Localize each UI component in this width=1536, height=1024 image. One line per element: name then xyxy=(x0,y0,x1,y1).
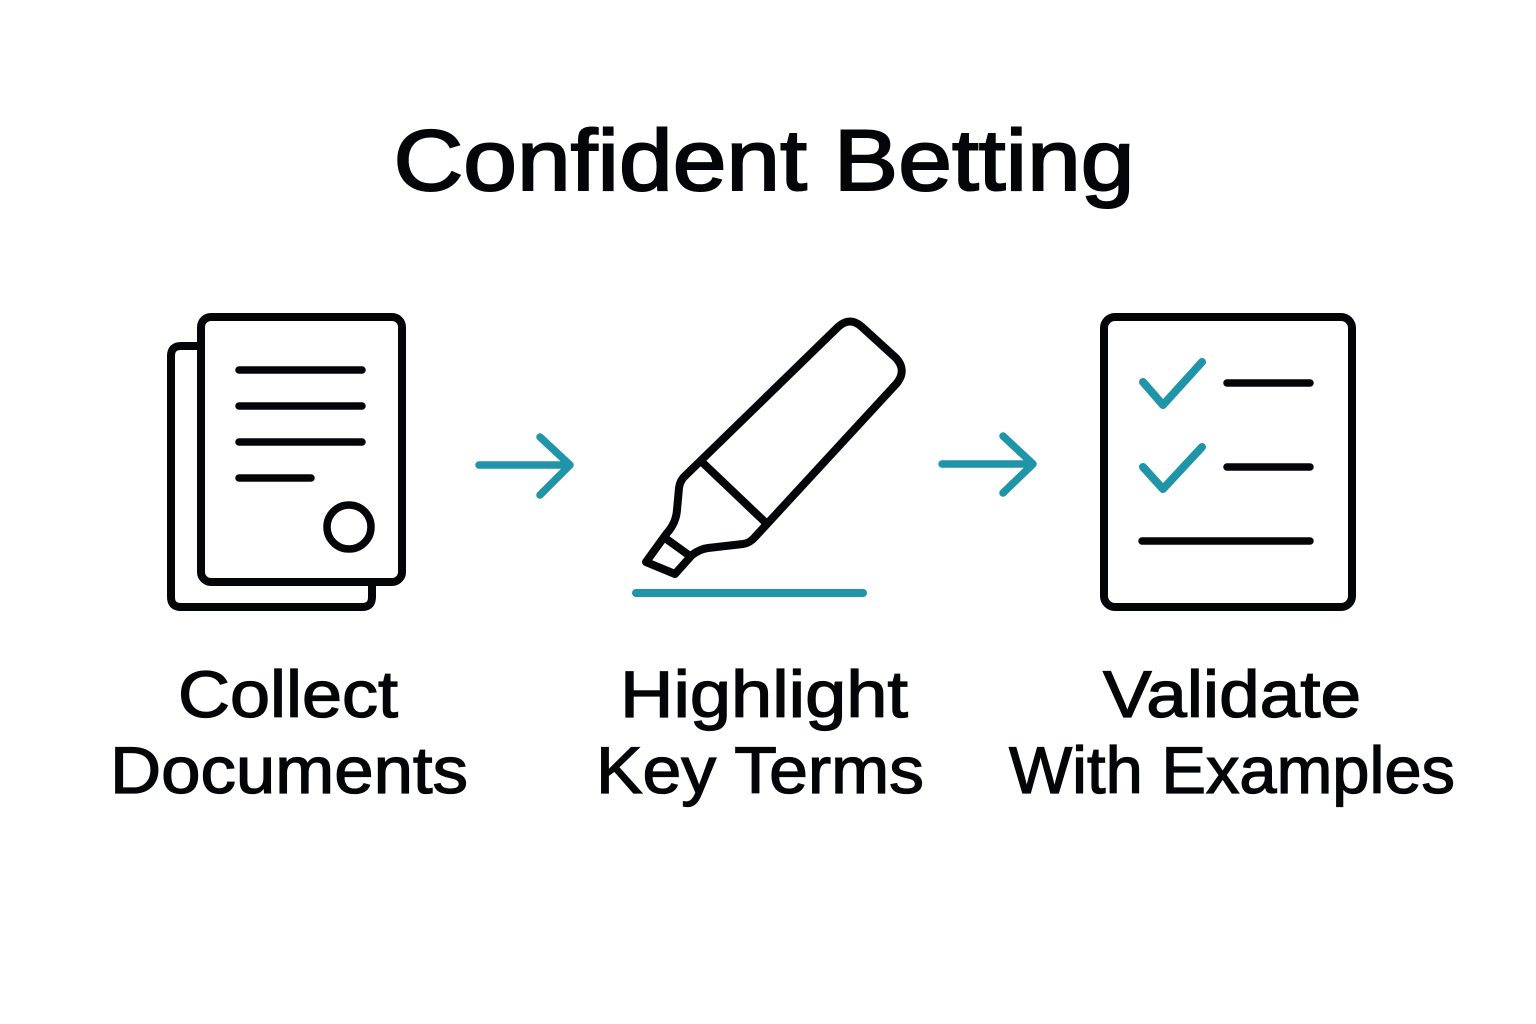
label: highlight key terms: Highlight xyxy=(620,657,908,731)
icon: documents xyxy=(171,317,402,607)
label: collect documents: Collect xyxy=(178,657,398,731)
label: collect documents xyxy=(110,657,468,807)
label: validate with examples xyxy=(1009,657,1455,807)
label: highlight key terms xyxy=(596,657,924,807)
arrow: collect to highlight xyxy=(479,437,570,495)
title: Confident Betting xyxy=(394,113,1134,209)
arrow: highlight to validate xyxy=(942,436,1033,493)
label: highlight key terms: Key Terms xyxy=(596,733,924,807)
label: validate with examples: Validate xyxy=(1103,657,1361,731)
label: validate with examples: With Examples xyxy=(1009,733,1455,807)
icon: checklist xyxy=(1104,317,1352,607)
icon: highlighter xyxy=(646,322,902,574)
label: collect documents: Documents xyxy=(110,733,468,807)
highlight underline xyxy=(636,589,863,597)
